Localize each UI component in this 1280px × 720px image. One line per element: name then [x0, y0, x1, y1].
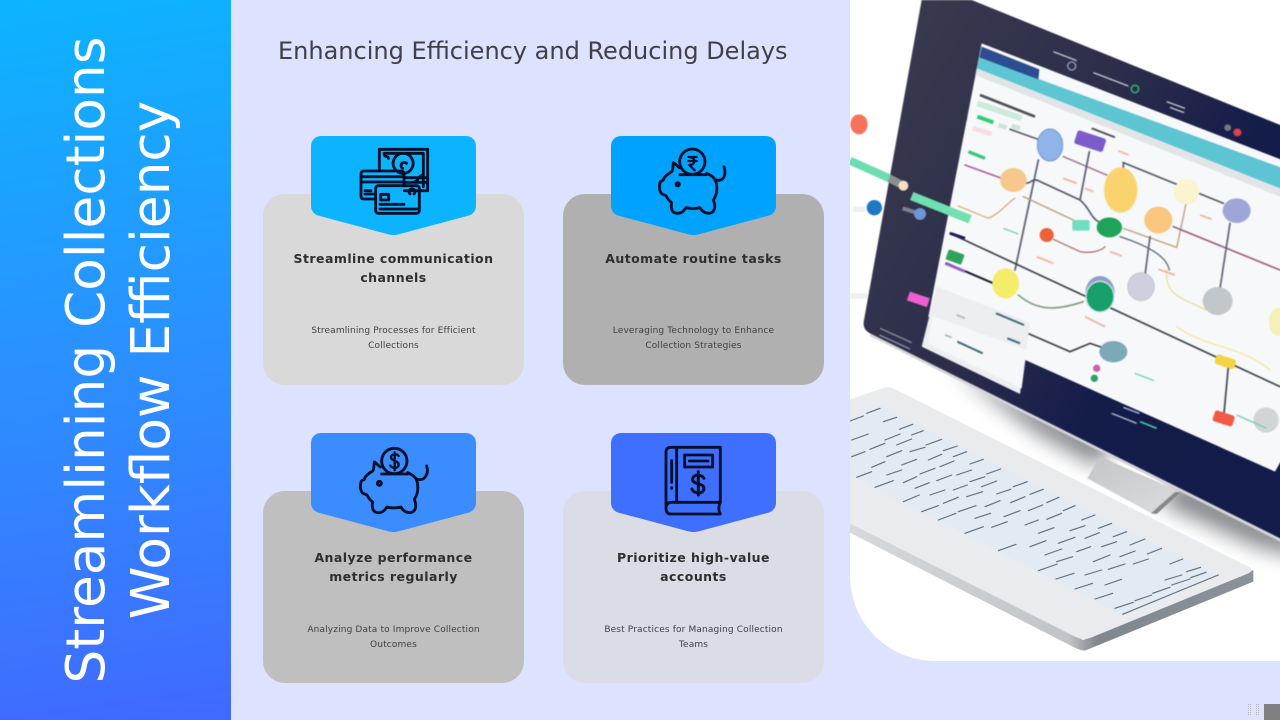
card: prioritize accounts — [563, 433, 824, 683]
card description: Leveraging Technology to Enhance — [613, 326, 774, 336]
keyboard key legends — [850, 408, 1218, 614]
sidebar title — [55, 37, 182, 684]
footer gray square — [1264, 704, 1280, 720]
card description — [311, 326, 476, 351]
card: analyze performance — [263, 433, 524, 683]
card panel — [263, 491, 524, 683]
card panel — [563, 491, 824, 683]
card heading: accounts — [660, 569, 727, 584]
monitor screen — [928, 43, 1280, 472]
card heading — [294, 251, 493, 285]
card description: Best Practices for Managing Collection — [604, 625, 783, 635]
card: streamline communication — [263, 136, 524, 385]
footer dotted patch — [1248, 704, 1259, 715]
monitor — [850, 0, 1280, 557]
card heading: Streamline communication — [294, 251, 493, 266]
card description: Collection Strategies — [645, 341, 742, 351]
card heading — [314, 550, 473, 584]
monitor bezel — [864, 0, 1280, 547]
icon badge: dollar piggy bank — [311, 433, 476, 532]
workflow connector lines — [947, 129, 1280, 413]
card heading — [617, 550, 770, 584]
monitor stand and shadows — [950, 367, 1280, 557]
sidebar panel — [0, 0, 231, 720]
sidebar title: Workflow Efficiency — [120, 101, 182, 619]
workflow nodes — [945, 129, 1280, 433]
overlay mini dashboard panel — [922, 287, 1030, 394]
card heading: Analyze performance — [314, 550, 473, 565]
card description — [604, 625, 783, 650]
icon badge: ledger book — [611, 433, 776, 532]
illustration: desktop computer with workflow diagram — [850, 0, 1280, 661]
card description: Analyzing Data to Improve Collection — [307, 625, 480, 635]
keyboard key area — [843, 407, 1218, 615]
card description: Outcomes — [370, 640, 417, 650]
floating decorations — [850, 114, 1157, 428]
card description: Streamlining Processes for Efficient — [311, 326, 476, 336]
card heading: metrics regularly — [329, 569, 458, 584]
card panel — [563, 194, 824, 385]
card description: Collections — [368, 341, 419, 351]
card heading: Prioritize high-value — [617, 550, 770, 565]
keyboard top surface — [843, 387, 1252, 639]
icon badge: rupee piggy bank — [611, 136, 776, 235]
keyboard — [843, 387, 1253, 651]
heading: Enhancing Efficiency and Reducing Delays — [278, 37, 788, 65]
icon badge: cash and cards — [311, 136, 476, 235]
card description: Teams — [679, 640, 708, 650]
card description — [613, 326, 774, 351]
card heading: Automate routine tasks — [605, 251, 782, 266]
screen header — [968, 47, 1280, 203]
card description — [307, 625, 480, 650]
keyboard side edge — [843, 520, 1253, 651]
card heading: channels — [360, 270, 427, 285]
sidebar title: Streamlining Collections — [55, 37, 117, 684]
card panel — [263, 194, 524, 385]
card: automate routine tasks — [563, 136, 824, 385]
